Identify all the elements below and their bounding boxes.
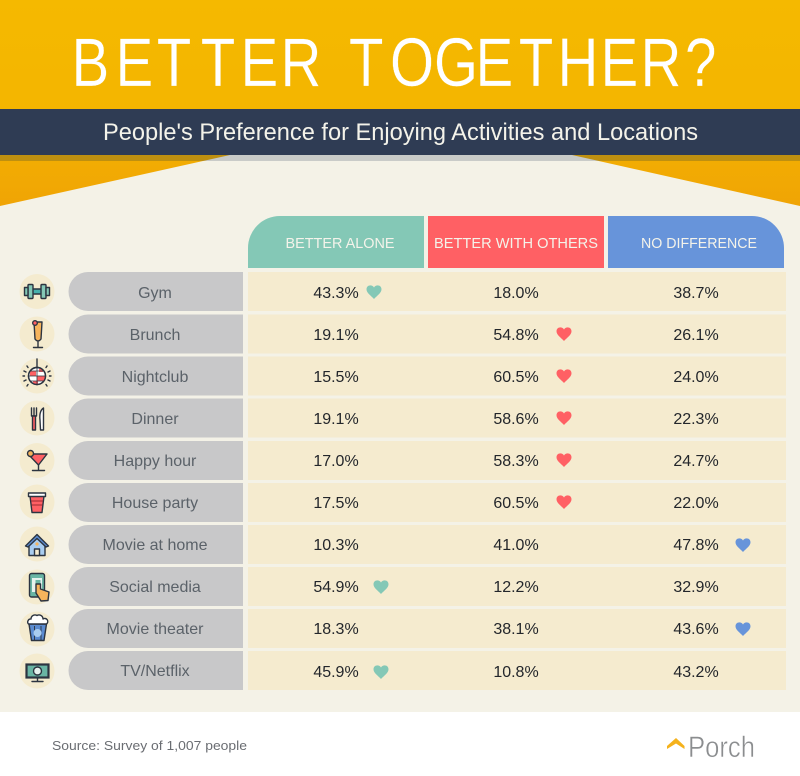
logo: Porch: Porch: [688, 731, 755, 764]
column header: better alone: [248, 216, 424, 268]
row: Movie theater: Movie theater: [107, 621, 204, 638]
label: Movie theater: [69, 609, 243, 648]
column header: better alone: BETTER ALONE: [286, 236, 395, 252]
row: Movie at home: 41.0%: [493, 537, 539, 554]
row: Movie theater: 38.1%: [493, 621, 539, 638]
cell background: [248, 398, 786, 438]
row: Brunch: 19.1%: [313, 327, 359, 344]
row: Dinner: [20, 398, 786, 438]
label: House party: [69, 483, 243, 522]
heart: [556, 327, 572, 341]
row: House party: [20, 483, 786, 522]
row: Dinner: 22.3%: [673, 411, 719, 428]
row: House party: 17.5%: [313, 495, 359, 512]
row: TV/Netflix: [20, 651, 786, 690]
heart: [556, 453, 572, 467]
row: Happy hour: 58.3%: [493, 453, 539, 470]
row: Gym: 18.0%: [493, 285, 539, 302]
icon: dumbbell: [20, 274, 54, 309]
row: Happy hour: Happy hour: [114, 453, 197, 470]
row: Happy hour: 17.0%: [313, 453, 359, 470]
row: Nightclub: [20, 356, 786, 396]
row: Gym: [20, 272, 786, 311]
row: House party: 22.0%: [673, 495, 719, 512]
label: Happy hour: [69, 441, 243, 480]
row: Movie at home: Movie at home: [103, 537, 208, 554]
row: Brunch: 26.1%: [673, 327, 719, 344]
row: TV/Netflix: 43.2%: [673, 664, 719, 681]
icon: television: [20, 654, 54, 688]
subtitle: People's Preference for Enjoying Activities and Locations: [103, 119, 698, 146]
cell background: [248, 441, 786, 480]
cell background: [248, 525, 786, 564]
label: Brunch: [69, 314, 243, 354]
icon: red cup: [20, 484, 54, 520]
heart: [374, 665, 388, 679]
row: Brunch: 54.8%: [493, 327, 539, 344]
cell background: [248, 356, 786, 396]
icon: cocktail: [20, 443, 54, 478]
row: House party: 60.5%: [493, 495, 539, 512]
icon: house: [20, 526, 54, 562]
cell background: [248, 609, 786, 648]
heart: [366, 285, 382, 299]
cell background: [248, 483, 786, 522]
row: Movie theater: [20, 609, 786, 648]
label: Dinner: [69, 398, 243, 438]
subtitle bar: [0, 109, 800, 155]
icon: brunch glass: [20, 316, 54, 352]
header: yellow banner with angled edges: [0, 0, 800, 206]
row: Nightclub: Nightclub: [122, 369, 188, 386]
row: Dinner: 58.6%: [493, 411, 539, 428]
label: Movie at home: [69, 525, 243, 564]
row: Movie at home: [20, 525, 786, 564]
row: TV/Netflix: 45.9%: [313, 664, 359, 681]
row: Social media: Social media: [109, 579, 201, 596]
column header: no difference: [608, 216, 784, 268]
banner shadow: [0, 155, 800, 161]
row: Social media: 54.9%: [313, 579, 359, 596]
row: Brunch: Brunch: [130, 327, 180, 344]
row: TV/Netflix: 10.8%: [493, 664, 539, 681]
row: Movie at home: 10.3%: [313, 537, 359, 554]
row: Movie at home: 47.8%: [673, 537, 719, 554]
row: Dinner: 19.1%: [313, 411, 359, 428]
icon: popcorn: [20, 612, 54, 646]
column header: better with others: [428, 216, 604, 268]
heart: [374, 580, 388, 594]
row: Movie theater: 18.3%: [313, 621, 359, 638]
column header: better with others: BETTER WITH OTHERS: [434, 236, 598, 252]
row: TV/Netflix: TV/Netflix: [120, 663, 190, 680]
logo: Porch: [667, 731, 755, 764]
heart: [736, 538, 750, 552]
cell background: [248, 651, 786, 690]
heart: [556, 369, 572, 383]
footer band: [0, 712, 800, 776]
source note: Source: Survey of 1,007 people: [52, 738, 247, 753]
row: House party: House party: [112, 495, 198, 512]
cell background: [248, 314, 786, 354]
icon: fork and knife: [20, 400, 54, 436]
row: Movie theater: 43.6%: [673, 621, 719, 638]
row: Gym: 38.7%: [673, 285, 719, 302]
row: Gym: Gym: [138, 285, 172, 302]
cell background: [248, 567, 786, 606]
row: Happy hour: 24.7%: [673, 453, 719, 470]
row: Social media: [20, 567, 786, 606]
row: Happy hour: [20, 441, 786, 480]
label: Gym: [69, 272, 243, 311]
heart: [556, 495, 572, 509]
icon: disco ball: [20, 358, 54, 394]
icon: phone with hand: [20, 570, 54, 604]
row: Nightclub: 24.0%: [673, 369, 719, 386]
row: Dinner: Dinner: [131, 411, 179, 428]
label: Social media: [69, 567, 243, 606]
label: TV/Netflix: [69, 651, 243, 690]
row: Social media: 32.9%: [673, 579, 719, 596]
title: BETTER TOGETHER?: [72, 25, 716, 101]
heart: [556, 411, 572, 425]
label: Nightclub: [69, 356, 243, 396]
cell background: [248, 272, 786, 311]
row: Nightclub: 60.5%: [493, 369, 539, 386]
column header: no difference: NO DIFFERENCE: [641, 236, 757, 252]
row: Gym: 43.3%: [313, 285, 359, 302]
row: Brunch: [20, 314, 786, 354]
heart: [736, 622, 750, 636]
row: Nightclub: 15.5%: [313, 369, 359, 386]
row: Social media: 12.2%: [493, 579, 539, 596]
